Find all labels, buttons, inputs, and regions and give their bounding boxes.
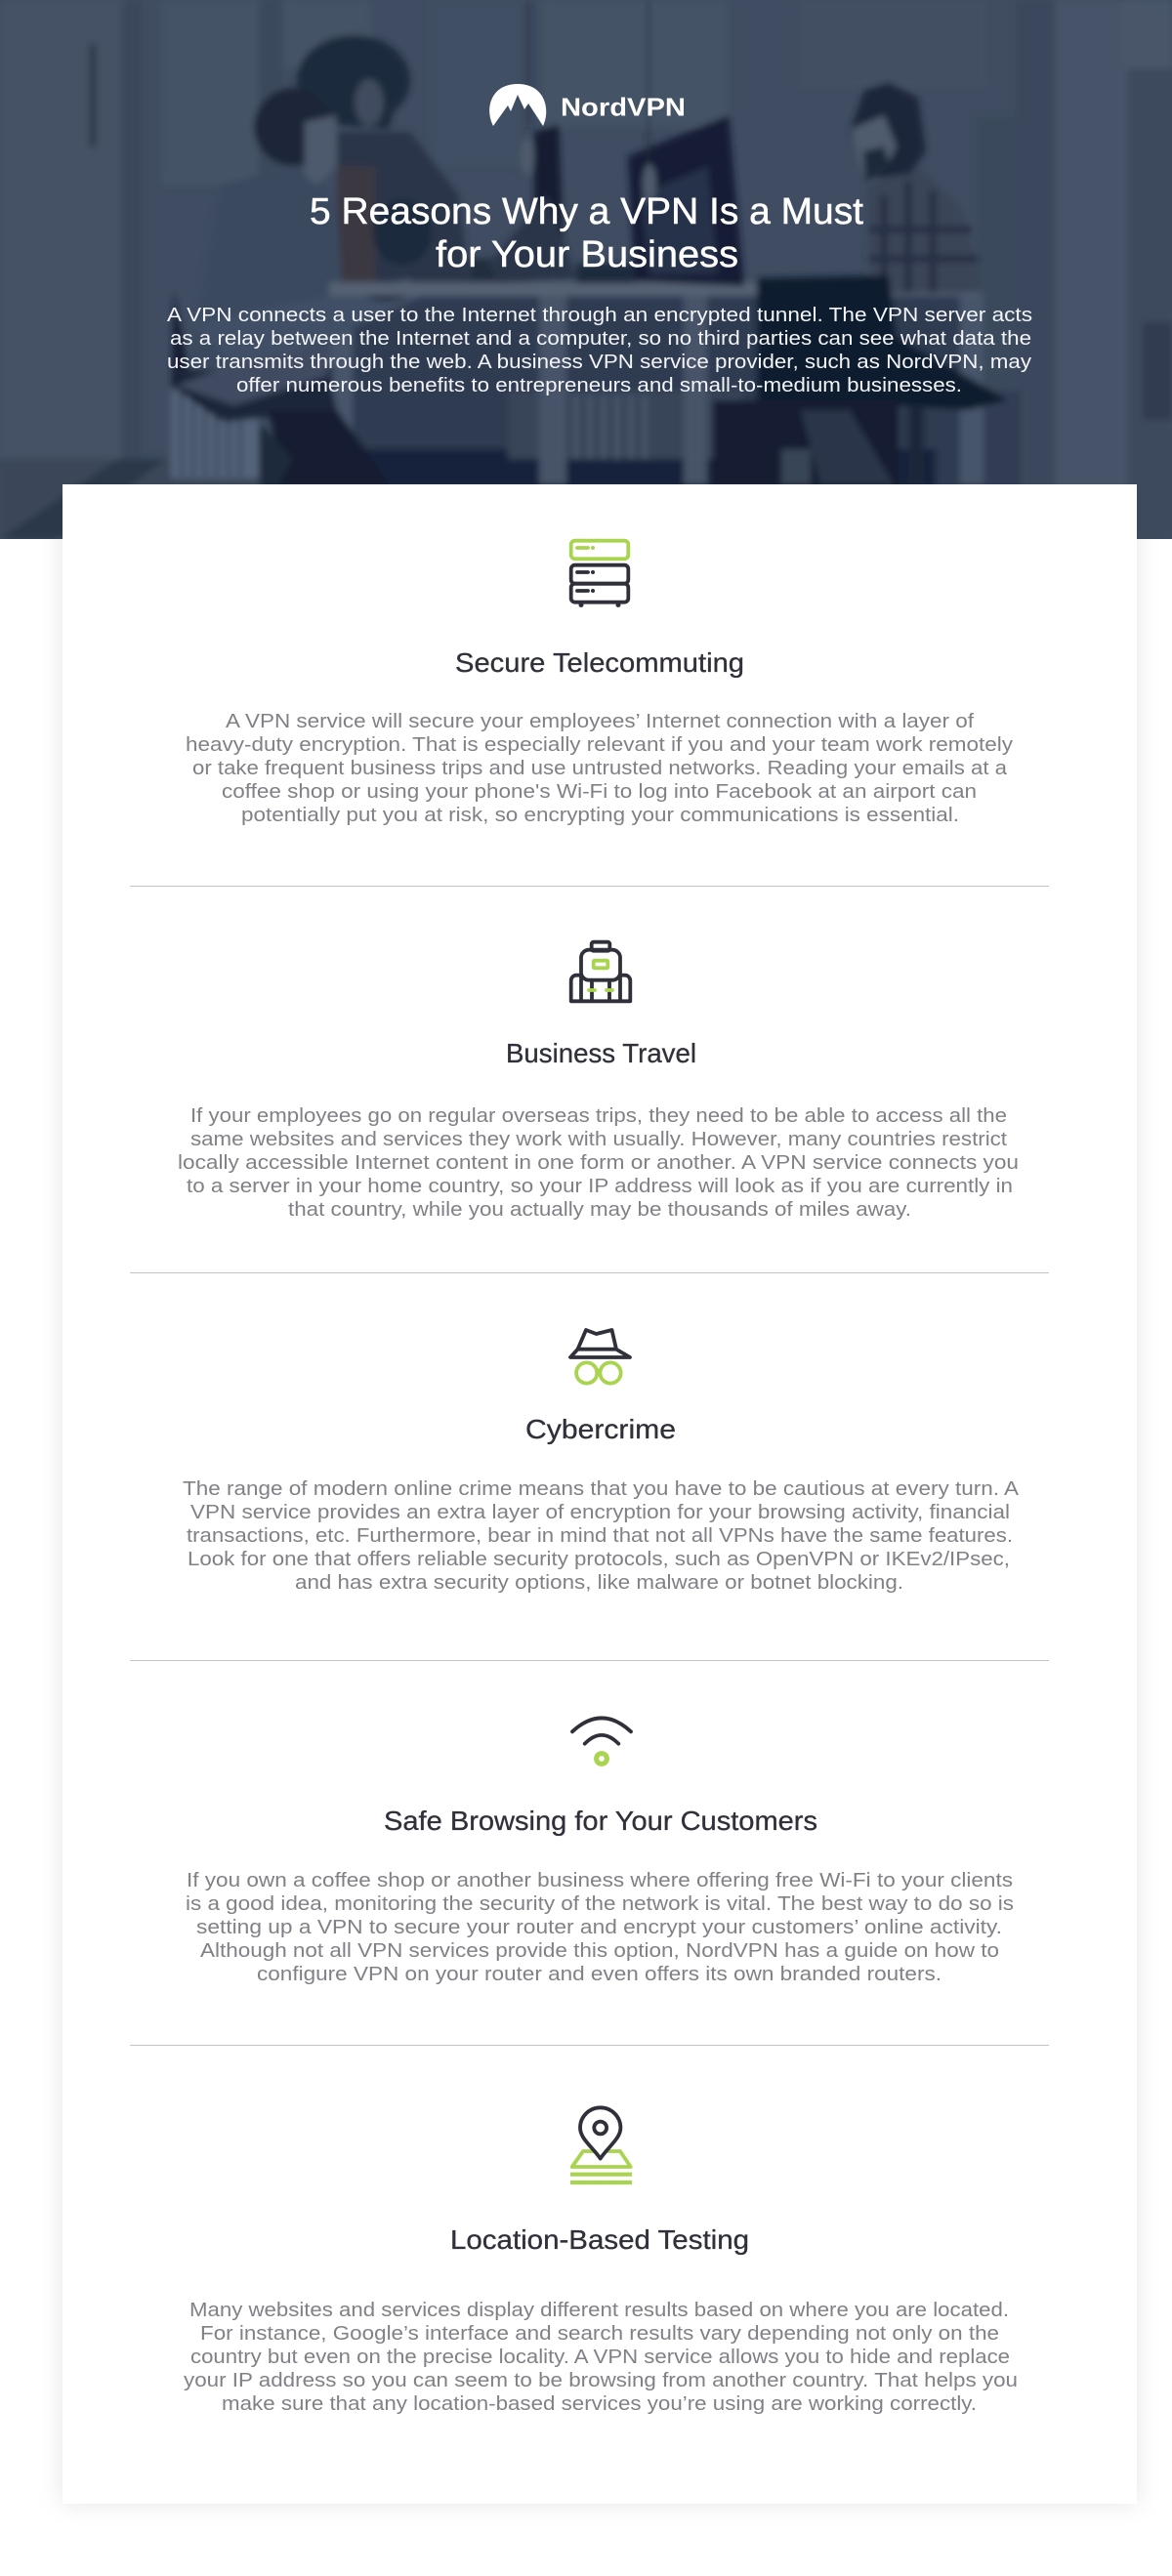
body text: The range of modern online crime means that you have to be cautious at every turn. A [183, 1478, 1020, 1500]
desk items [466, 256, 498, 283]
body text [183, 1478, 1020, 1594]
hero photo background [0, 0, 1172, 539]
woman hair [297, 35, 410, 125]
body text: If you own a coffee shop or another business where offering free Wi-Fi to your clients [187, 1870, 1013, 1891]
title: for Your Business [436, 234, 738, 275]
woman face [355, 79, 384, 126]
area under table [352, 296, 960, 451]
heading: Location-Based Testing [450, 2224, 749, 2255]
body text [186, 711, 1013, 826]
section: Safe Browsing for Your Customers [186, 1718, 1014, 1985]
intro paragraph [167, 305, 1032, 396]
wordmark: NordVPN [561, 92, 686, 121]
monitor 2 [628, 115, 744, 286]
seated person hand [369, 294, 402, 303]
body text: to a server in your home country, so your IP address will look as if you are currently in [187, 1176, 1013, 1197]
body text: Look for one that offers reliable security protocols, such as OpenVPN or IKEv2/IPsec, [188, 1549, 1010, 1570]
body text: is a good idea, monitoring the security of the network is vital. The best way to do so is [186, 1893, 1014, 1915]
icon: backpack [571, 942, 630, 1001]
body text: transactions, etc. Furthermore, bear in mind that not all VPNs have the same features. [187, 1525, 1013, 1547]
logo [489, 84, 686, 126]
icon: NordVPN mountain dome [489, 84, 546, 126]
section: Business Travel [178, 942, 1019, 1221]
body text: VPN service provides an extra layer of encryption for your browsing activity, financial [190, 1502, 1010, 1523]
intro paragraph: A VPN connects a user to the Internet through an encrypted tunnel. The VPN server acts [167, 305, 1032, 326]
section: Location-Based Testing [184, 2107, 1018, 2415]
icon: map pin [570, 2107, 632, 2182]
heading: Safe Browsing for Your Customers [384, 1806, 817, 1836]
body text [184, 2300, 1018, 2415]
right man chair [757, 275, 1009, 410]
heading: Cybercrime [525, 1414, 676, 1444]
body text [186, 1870, 1014, 1985]
monitor 1 [530, 123, 566, 237]
body text: heavy-duty encryption. That is especially relevant if you and your team work remotely [186, 734, 1013, 756]
heading: Secure Telecommuting [455, 647, 744, 678]
section: Secure Telecommuting [186, 541, 1013, 826]
radiator [171, 391, 259, 478]
body text: your IP address so you can seem to be browsing from another country. That helps you [184, 2370, 1018, 2391]
heading: Business Travel [506, 1038, 696, 1068]
seated person left [244, 180, 344, 281]
section: Cybercrime [183, 1330, 1020, 1594]
body text: coffee shop or using your phone's Wi-Fi to log into Facebook at an airport can [222, 781, 977, 803]
card shadow [63, 484, 1137, 2504]
woman standing body [337, 132, 469, 283]
body text: If your employees go on regular overseas trips, they need to be able to access all the [190, 1105, 1007, 1127]
title: 5 Reasons Why a VPN Is a Must [310, 191, 863, 232]
body text: make sure that any location-based services you’re using are working correctly. [222, 2393, 977, 2415]
body text: setting up a VPN to secure your router and encrypt your customers’ online activity. [196, 1917, 1002, 1938]
white card [63, 484, 1137, 2504]
body text: same websites and services they work with usually. However, many countries restrict [190, 1129, 1007, 1150]
center person behind monitors [373, 199, 432, 266]
seated person chair [172, 293, 332, 420]
hanging cords [528, 0, 649, 166]
table legs [328, 328, 355, 432]
title [310, 191, 863, 275]
icon: server stack [571, 541, 628, 607]
body text: that country, while you actually may be thousands of miles away. [288, 1199, 911, 1221]
body text: country but even on the precise locality. A VPN service allows you to hide and replace [190, 2347, 1010, 2368]
body text [178, 1105, 1019, 1221]
body text: Although not all VPN services provide this option, NordVPN has a guide on how to [200, 1940, 999, 1962]
intro paragraph: offer numerous benefits to entrepreneurs and small-to-medium businesses. [236, 375, 962, 396]
body text: or take frequent business trips and use untrusted networks. Reading your emails at a [192, 758, 1008, 779]
body text: For instance, Google’s interface and search results vary depending not only on the [200, 2323, 999, 2345]
icon: hat and glasses [570, 1330, 630, 1384]
body text: locally accessible Internet content in one form or another. A VPN service connects you [178, 1152, 1019, 1174]
body text: Many websites and services display different results based on where you are located. [189, 2300, 1009, 2321]
table top [329, 282, 979, 296]
body text: potentially put you at risk, so encrypting your communications is essential. [241, 805, 959, 826]
intro paragraph: as a relay between the Internet and a computer, so no third parties can see what data the [170, 328, 1031, 350]
intro paragraph: user transmits through the web. A business VPN service provider, such as NordVPN, may [167, 352, 1031, 373]
icon: wifi [572, 1718, 631, 1764]
right man [867, 166, 982, 293]
body text: A VPN service will secure your employees’ Internet connection with a layer of [226, 711, 974, 732]
body text: and has extra security options, like malware or botnet blocking. [295, 1572, 903, 1594]
body text: configure VPN on your router and even offers its own branded routers. [257, 1964, 942, 1985]
